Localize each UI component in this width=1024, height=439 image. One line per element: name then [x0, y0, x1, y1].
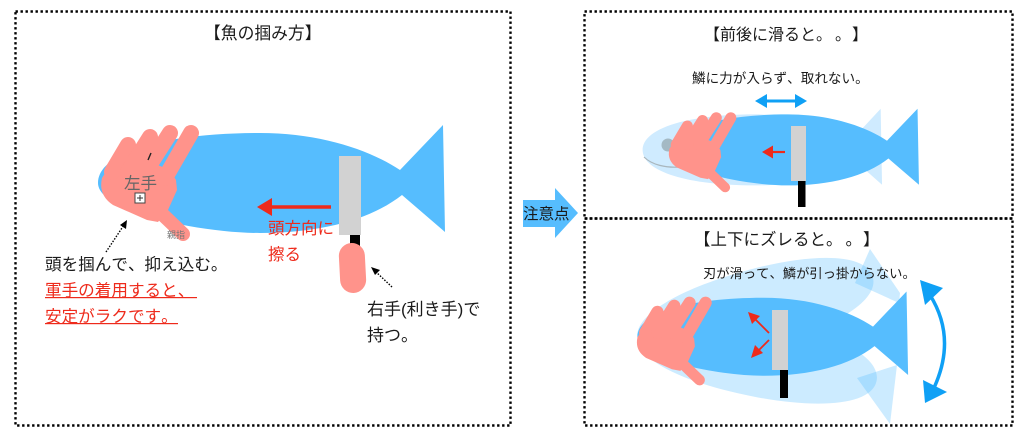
red label: rub toward head — [268, 219, 334, 264]
text: right hand instructions: 右手(利き手)で — [367, 300, 480, 319]
arrow: pointer to left hand — [106, 220, 127, 252]
text: right hand instructions: 持つ。 — [367, 326, 418, 345]
illustration: knife — [791, 126, 806, 207]
illustration: hand — [637, 303, 706, 380]
arrow: stroke toward head — [257, 198, 331, 216]
arrow: pointer to right hand — [371, 267, 392, 287]
panel: sliding back and forth — [584, 12, 1012, 218]
arrow: back and forth — [755, 94, 807, 108]
panel: sliding up and down — [584, 218, 1012, 426]
text: left hand instructions: 安定がラクです。 — [45, 307, 178, 326]
text: scales not removed: 鱗に力が入らず、取れない。 — [692, 71, 869, 86]
heading: sliding back and forth: 【前後に滑ると。。】 — [704, 26, 868, 44]
text: left hand instructions: 軍手の着用すると、 — [45, 281, 194, 300]
illustration: knife — [772, 310, 788, 398]
illustration: fish — [673, 109, 919, 185]
illustration: fish — [98, 125, 445, 233]
illustration: fish — [637, 292, 908, 376]
arrow: red stroke direction — [762, 146, 785, 158]
illustration: left hand: 親指 — [167, 229, 185, 240]
arrow: caution: 注意点 — [523, 205, 570, 223]
panel: how to grip the fish — [16, 12, 510, 426]
illustration: upper ghost fish body — [628, 239, 883, 378]
text: left hand instructions — [45, 255, 228, 326]
text: left hand instructions: 頭を掴んで、抑え込む。 — [45, 255, 228, 274]
text: blade slips: 刃が滑って、鱗が引っ掛からない。 — [703, 266, 916, 281]
red label: rub toward head: 頭方向に — [268, 219, 334, 238]
arrows: red blade deflection — [748, 312, 769, 358]
illustration: left hand: 左手 — [124, 174, 157, 193]
illustration: knife — [339, 156, 361, 250]
heading: sliding up and down: 【上下にズレると。。】 — [694, 230, 880, 249]
heading: how to grip: 【魚の掴み方】 — [204, 24, 321, 43]
illustration: hand — [669, 118, 731, 187]
arrow: up and down — [920, 280, 947, 403]
red label: rub toward head: 擦る — [268, 245, 301, 264]
illustration: ghost tails — [855, 249, 900, 424]
illustration: right hand — [338, 242, 367, 294]
text: right hand instructions — [367, 300, 480, 345]
illustration: ghost fish — [643, 109, 882, 185]
arrow: caution — [523, 188, 578, 238]
illustration: lower ghost fish body — [630, 296, 884, 419]
illustration: left hand — [101, 133, 191, 240]
